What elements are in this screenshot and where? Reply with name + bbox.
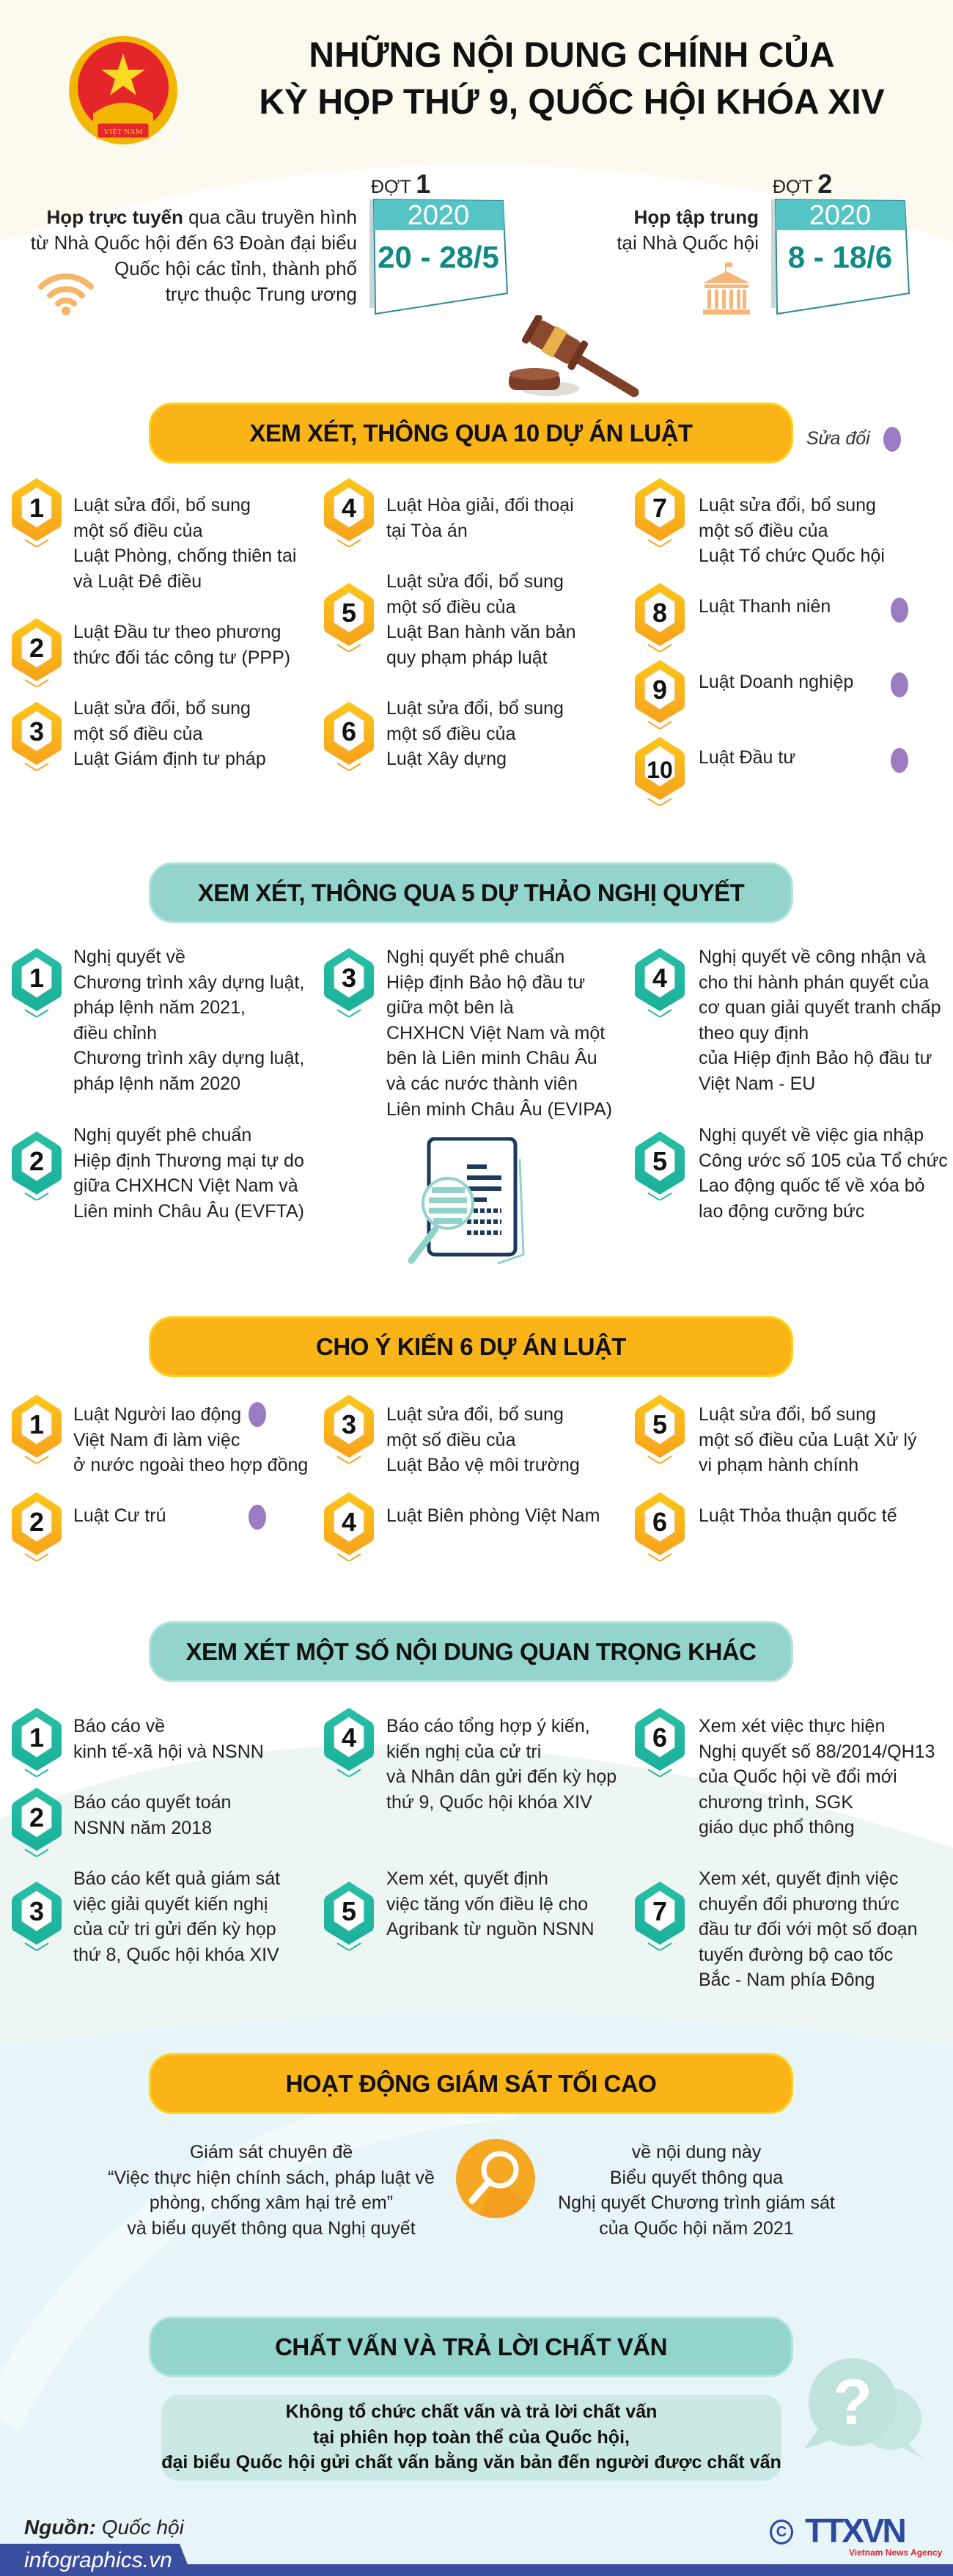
legend: amended <box>806 427 901 452</box>
item 5: 5 <box>652 1409 667 1439</box>
item 6: Luật Xây dựng <box>386 749 507 769</box>
item 1: Nghị quyết về <box>73 947 185 967</box>
text: supervision left: “Việc thực hiện chính sách, pháp luật về <box>108 2168 435 2188</box>
item 3: một số điều của <box>386 1430 516 1450</box>
item 2: 2 <box>29 1802 44 1832</box>
item 6: giáo dục phổ thông <box>699 1817 855 1838</box>
item 5: một số điều của Luật Xử lý <box>699 1430 916 1450</box>
item 5: vi phạm hành chính <box>699 1455 858 1475</box>
item 6 <box>635 1492 897 1561</box>
session 2 text <box>617 206 759 254</box>
item 1: Việt Nam đi làm việc <box>73 1430 240 1450</box>
item 3: Liên minh Châu Âu (EVIPA) <box>386 1099 612 1120</box>
item 5: Luật Ban hành văn bản <box>386 622 576 642</box>
item 1: pháp lệnh năm 2020 <box>73 1074 240 1094</box>
item 4 <box>324 1708 617 1813</box>
item 4: kiến nghị của cử tri <box>386 1742 541 1762</box>
item 6: Xem xét việc thực hiện <box>699 1716 885 1736</box>
item 2: 2 <box>29 633 44 663</box>
logo: TTXVN: C <box>776 2524 787 2540</box>
icon: magnifier circle <box>455 2138 537 2220</box>
item 5: quy phạm pháp luật <box>386 647 548 668</box>
item 2: 2 <box>29 1507 44 1537</box>
item 4: của Hiệp định Bảo hộ đầu tư <box>699 1048 932 1068</box>
item 4: 4 <box>342 1722 356 1753</box>
session 2 text: tại Nhà Quốc hội <box>617 232 759 254</box>
item 2: Luật Đầu tư theo phương <box>73 622 281 642</box>
item 5: Công ước số 105 của Tổ chức <box>699 1151 948 1171</box>
calendar 2: ĐỢT 2 <box>773 169 832 199</box>
item 1 <box>12 947 304 1094</box>
item 7: chuyển đổi phương thức <box>699 1894 899 1915</box>
item 3: Hiệp định Bảo hộ đầu tư <box>386 972 585 993</box>
callout: questioning note: Không tổ chức chất vấn và trả lời chất vấn <box>286 2401 657 2422</box>
item 3: 3 <box>29 1896 44 1926</box>
item 7 <box>623 1866 946 1998</box>
footer bar <box>0 2543 953 2576</box>
item 2: giữa CHXHCN Việt Nam và <box>73 1175 298 1196</box>
banner: 10 laws: XEM XÉT, THÔNG QUA 10 DỰ ÁN LUẬT <box>249 419 693 446</box>
item 3: của cử tri gửi đến kỳ họp <box>73 1919 276 1940</box>
banner: supreme supervision: HOẠT ĐỘNG GIÁM SÁT TỐI CAO <box>286 2069 656 2097</box>
item 6: một số điều của <box>386 724 516 744</box>
item 3: Luật sửa đổi, bổ sung <box>73 698 251 719</box>
item 1: pháp lệnh năm 2021, <box>73 997 246 1018</box>
calendar 2: 8 - 18/6 <box>788 240 892 274</box>
item 7: một số điều của <box>699 521 828 541</box>
callout: questioning note: tại phiên họp toàn thể của Quốc hội, <box>313 2427 630 2448</box>
item 4: Luật Biên phòng Việt Nam <box>386 1505 600 1526</box>
item 4: thứ 9, Quốc hội khóa XIV <box>386 1792 592 1813</box>
item 3: giữa một bên là <box>386 997 514 1018</box>
item 1: điều chỉnh <box>73 1023 157 1043</box>
item 10 <box>635 737 908 806</box>
item 2 <box>12 618 290 687</box>
item 4: 4 <box>342 493 356 523</box>
banner: 5 resolutions: XEM XÉT, THÔNG QUA 5 DỰ THẢO NGHỊ QUYẾT <box>198 878 744 906</box>
item 1: 1 <box>29 963 44 993</box>
item 6: 6 <box>652 1507 667 1537</box>
item 1: và Luật Đê điều <box>73 571 202 592</box>
item 6 <box>324 698 564 771</box>
item 7: đầu tư đối với một số đoạn <box>699 1919 918 1940</box>
item 6: chương trình, SGK <box>699 1792 853 1813</box>
panel: 10 laws: Luật Tổ chức Quốc hội <box>699 546 885 566</box>
item 6: Nghị quyết số 88/2014/QH13 <box>699 1742 935 1762</box>
item 7 <box>635 478 885 566</box>
icon: wifi <box>38 273 94 315</box>
item 2: 2 <box>29 1146 44 1176</box>
item 3: và các nước thành viên <box>386 1074 578 1094</box>
text: supervision left: Giám sát chuyên đề <box>190 2142 353 2162</box>
item 2 <box>12 1788 231 1857</box>
callout: questioning note: đại biểu Quốc hội gửi chất vấn bằng văn bản đến người được chất vấn <box>161 2452 781 2473</box>
icon: building <box>703 263 750 315</box>
item 5 <box>635 1125 948 1222</box>
banner: questioning: CHẤT VẤN VÀ TRẢ LỜI CHẤT VẤN <box>275 2333 667 2360</box>
item 4: theo quy định <box>699 1023 809 1043</box>
item 2: NSNN năm 2018 <box>73 1818 212 1838</box>
session 2 text: Họp tập trung <box>634 206 759 228</box>
panel: other matters <box>12 1708 935 1990</box>
item 5: 5 <box>652 1146 667 1176</box>
item 1: 1 <box>29 1409 44 1439</box>
banner: questioning <box>149 2316 793 2377</box>
logo: TTXVN: Vietnam News Agency <box>849 2547 942 2558</box>
item 7: 7 <box>652 493 667 523</box>
item 5: 5 <box>342 1896 356 1926</box>
item 5: một số điều của <box>386 597 516 617</box>
item 3: việc giải quyết kiến nghị <box>73 1894 268 1915</box>
item 3: 3 <box>342 1409 356 1439</box>
item 5: Luật sửa đổi, bổ sung <box>699 1404 876 1425</box>
item 7: Luật sửa đổi, bổ sung <box>699 495 876 515</box>
item 2: Hiệp định Thương mại tự do <box>73 1151 304 1171</box>
banner: 6 draft laws <box>149 1316 793 1377</box>
item 1: Chương trình xây dựng luật, <box>73 1048 304 1068</box>
icon: question bubbles <box>803 2357 929 2464</box>
item 4: Luật Hòa giải, đối thoại <box>386 495 574 515</box>
banner: other matters <box>149 1621 793 1682</box>
item 5: Lao động quốc tế về xóa bỏ <box>699 1175 925 1196</box>
text: supervision left: phòng, chống xâm hại trẻ em” <box>150 2192 393 2213</box>
text: supervision right <box>542 2140 850 2241</box>
item 1: Luật sửa đổi, bổ sung <box>73 495 251 515</box>
item 3: 3 <box>342 963 356 993</box>
text: supervision right: của Quốc hội năm 2021 <box>599 2218 794 2239</box>
item 3 <box>12 698 266 771</box>
emblem: VIỆT NAM <box>103 128 143 136</box>
banner: 5 resolutions <box>149 862 793 923</box>
item 8 <box>635 583 908 652</box>
item 4: tại Tòa án <box>386 521 468 541</box>
item 1: kinh tế-xã hội và NSNN <box>73 1742 264 1762</box>
banner: other matters: XEM XÉT MỘT SỐ NỘI DUNG QUAN TRỌNG KHÁC <box>185 1638 757 1665</box>
item 3: Luật Giám định tư pháp <box>73 749 266 769</box>
item 7: Bắc - Nam phía Đông <box>699 1970 875 1990</box>
panel: 5 resolutions <box>12 947 948 1264</box>
item 6: của Quốc hội về đổi mới <box>699 1766 897 1787</box>
calendar 1: 20 - 28/5 <box>378 240 499 274</box>
item 2: thức đối tác công tư (PPP) <box>73 647 290 668</box>
item 1: Báo cáo về <box>73 1716 165 1736</box>
item 4 <box>635 947 941 1094</box>
title: KỲ HỌP THỨ 9, QUỐC HỘI KHÓA XIV <box>259 83 885 122</box>
session 1 text: Quốc hội các tỉnh, thành phố <box>114 257 357 279</box>
item 4: 4 <box>342 1507 356 1537</box>
text: supervision left <box>88 2140 455 2241</box>
logo: TTXVN <box>762 2517 946 2559</box>
item 3: CHXHCN Việt Nam và một <box>386 1023 605 1043</box>
item 4: cho thi hành phán quyết của <box>699 972 929 993</box>
item 9 <box>635 660 908 729</box>
item 9: 9 <box>652 675 667 705</box>
item 4 <box>324 1492 600 1561</box>
session 1 text: Họp trực tuyến qua cầu truyền hình <box>47 206 357 228</box>
item 3 <box>324 1395 580 1475</box>
panel: 10 laws <box>12 478 908 806</box>
banner: supreme supervision <box>149 2053 793 2114</box>
item 1: ở nước ngoài theo hợp đồng <box>73 1455 308 1475</box>
item 1: Luật Người lao động <box>73 1404 241 1425</box>
item 6: 6 <box>652 1722 667 1753</box>
item 8: Luật Thanh niên <box>699 596 831 617</box>
item 6: Luật Thỏa thuận quốc tế <box>699 1505 897 1526</box>
callout: questioning note <box>161 2395 781 2481</box>
banner: 6 draft laws: CHO Ý KIẾN 6 DỰ ÁN LUẬT <box>316 1333 626 1359</box>
title <box>259 35 885 122</box>
session 1 text <box>31 206 357 305</box>
item 4: và Nhân dân gửi đến kỳ họp <box>386 1766 617 1787</box>
item 3: thứ 8, Quốc hội khóa XIV <box>73 1945 279 1965</box>
item 1: một số điều của <box>73 521 202 541</box>
item 1 <box>12 1708 264 1777</box>
item 5: lao động cưỡng bức <box>699 1201 864 1222</box>
item 2: Nghị quyết phê chuẩn <box>73 1125 251 1145</box>
item 4: 4 <box>652 963 667 993</box>
item 1: 1 <box>29 493 44 523</box>
item 3 <box>12 1868 280 1965</box>
item 3: bên là Liên minh Châu Âu <box>386 1048 597 1068</box>
item 7: Xem xét, quyết định việc <box>699 1868 898 1889</box>
item 10: 10 <box>647 757 673 783</box>
item 9: Luật Doanh nghiệp <box>699 672 853 692</box>
item 1: Luật Phòng, chống thiên tai <box>73 546 296 566</box>
text: supervision left: và biểu quyết thông qua Nghị quyết <box>127 2218 416 2239</box>
source: Nguồn: Quốc hội <box>24 2516 184 2539</box>
item 1: 1 <box>29 1722 44 1753</box>
item 3 <box>324 947 612 1120</box>
item 4 <box>324 478 574 547</box>
title: NHỮNG NỘI DUNG CHÍNH CỦA <box>309 36 835 75</box>
item 5: Agribank từ nguồn NSNN <box>386 1919 595 1940</box>
footer: website: infographics.vn <box>24 2548 172 2572</box>
panel: 6 draft laws <box>12 1395 916 1561</box>
item 2: Liên minh Châu Âu (EVFTA) <box>73 1201 304 1222</box>
item 5 <box>324 571 576 668</box>
item 8: 8 <box>652 598 667 628</box>
item 3: Luật sửa đổi, bổ sung <box>386 1404 564 1425</box>
item 2 <box>12 1125 304 1222</box>
item 4: Nghị quyết về công nhận và <box>699 947 926 967</box>
item 3: 3 <box>29 716 44 746</box>
item 5 <box>635 1395 916 1475</box>
emblem <box>69 36 177 144</box>
item 2: Luật Cư trú <box>73 1505 166 1526</box>
session 1 text: từ Nhà Quốc hội đến 63 Đoàn đại biểu <box>31 232 357 254</box>
item 5: việc tăng vốn điều lệ cho <box>386 1894 588 1915</box>
item 10: Luật Đầu tư <box>699 747 795 768</box>
icon: gavel <box>509 315 639 397</box>
item 7: tuyến đường bộ cao tốc <box>699 1945 893 1965</box>
item 3: Luật Bảo vệ môi trường <box>386 1455 580 1475</box>
item 1: Chương trình xây dựng luật, <box>73 972 304 993</box>
text: supervision right: Nghị quyết Chương trình giám sát <box>558 2192 835 2213</box>
item 5: Nghị quyết về việc gia nhập <box>699 1125 924 1145</box>
icon: question bubbles: ? <box>833 2366 872 2438</box>
item 3: một số điều của <box>73 724 202 744</box>
item 5: Luật sửa đổi, bổ sung <box>386 571 564 592</box>
item 5: 5 <box>342 598 356 628</box>
item 4: Việt Nam - EU <box>699 1074 815 1094</box>
calendar 2: 2020 <box>809 200 871 231</box>
item 4: Báo cáo tổng hợp ý kiến, <box>386 1716 590 1736</box>
calendar 2 <box>771 169 910 315</box>
item 1 <box>12 1395 308 1475</box>
item 2 <box>12 1492 266 1561</box>
item 1 <box>12 478 296 592</box>
item 3: Nghị quyết phê chuẩn <box>386 947 564 967</box>
session 1 text: trực thuộc Trung ương <box>166 283 357 305</box>
icon: document with magnifier <box>408 1137 525 1264</box>
calendar 1: 2020 <box>408 200 469 231</box>
item 5: Xem xét, quyết định <box>386 1868 548 1889</box>
calendar 1: ĐỢT 1 <box>371 169 430 199</box>
calendar 1 <box>369 169 509 315</box>
item 3: Báo cáo kết quả giám sát <box>73 1868 280 1889</box>
item 7: 7 <box>652 1896 667 1926</box>
item 2: Báo cáo quyết toán <box>73 1792 231 1813</box>
item 6 <box>623 1705 946 1841</box>
text: supervision right: về nội dung này <box>632 2142 761 2162</box>
item 6: 6 <box>342 716 356 746</box>
text: supervision right: Biểu quyết thông qua <box>610 2168 783 2188</box>
item 5 <box>312 1866 620 1954</box>
item 6: Luật sửa đổi, bổ sung <box>386 698 564 719</box>
banner: 10 laws <box>149 403 793 463</box>
legend: amended: Sửa đổi <box>806 428 870 449</box>
item 4: cơ quan giải quyết tranh chấp <box>699 997 941 1018</box>
